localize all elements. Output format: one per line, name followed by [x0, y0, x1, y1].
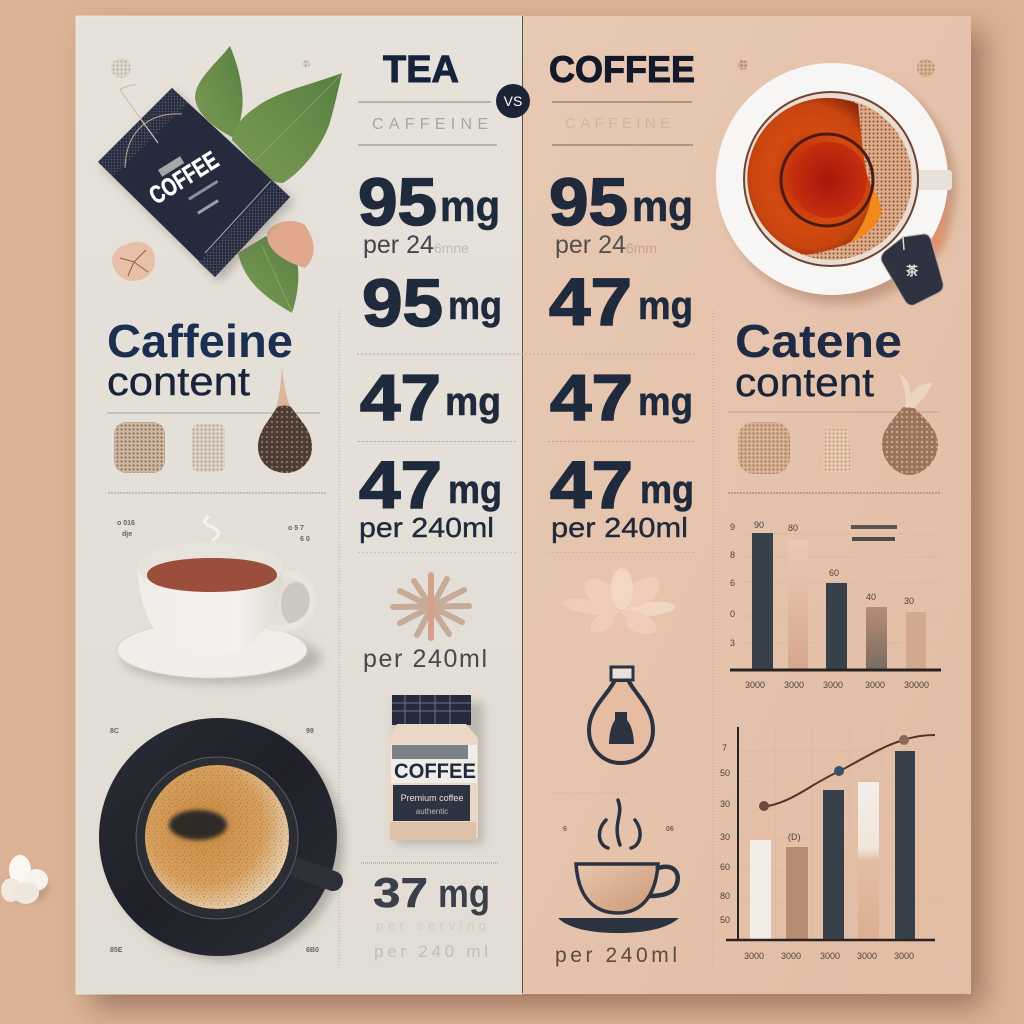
illustration: dark coffee sachet [98, 58, 294, 282]
text: per 240ml tea: per 240ml [363, 645, 487, 673]
bar chart: upper: 80 [788, 523, 798, 533]
bar chart with line: lower [720, 727, 941, 961]
stat: coffee 47mg third row [550, 361, 693, 434]
illustrations: texture swatches and seed (tea side) [114, 367, 312, 473]
text: faded caption: per serving [376, 918, 486, 933]
text: faded caption: per 240 ml [374, 942, 488, 961]
bar chart: upper: 3000 [784, 680, 804, 690]
stat: coffee 47mg third row: mg [638, 380, 693, 424]
stat: tea 47mg per 240ml: 47 [359, 448, 442, 523]
stat: tea 47mg per 240ml [359, 448, 502, 543]
subheading: coffee caffeine: CAFFEINE [565, 115, 670, 132]
tiny ornaments beside steam: 6 [563, 826, 567, 833]
stat: coffee 47mg per 240ml: mg [640, 468, 694, 512]
bar chart: upper [730, 520, 941, 690]
stat: coffee 47mg third row: 47 [550, 361, 633, 434]
bar chart: upper: 60 [829, 568, 839, 578]
bar chart: upper: 0 [730, 609, 735, 619]
stat: tea 47mg per 240ml: per 240ml [359, 512, 494, 543]
stat: coffee 47mg second row: mg [638, 284, 693, 328]
bars [752, 533, 926, 670]
stat: coffee 95mg [549, 165, 693, 259]
bar chart: upper: 3000 [823, 680, 843, 690]
text: tea caffeine content [107, 315, 293, 404]
stat: coffee 47mg per 240ml: per 240ml [551, 512, 688, 543]
bar chart with line: lower: 3000 [857, 951, 877, 961]
stat: tea 95mg: per 246mne [363, 231, 469, 259]
illustration: dark coffee sachet: COFFEE [144, 146, 224, 210]
stat: coffee 47mg per 240ml [550, 448, 694, 543]
stat: coffee 95mg: mg [632, 182, 693, 231]
text: tea caffeine content: Caffeine [107, 315, 293, 367]
icon: steaming cup [558, 800, 679, 933]
stat: tea 47mg per 240ml: mg [448, 468, 502, 512]
bar chart: upper: 3000 [865, 680, 885, 690]
small ornament [302, 60, 310, 68]
bar chart with line: lower: 50 [720, 768, 730, 778]
bar chart with line: lower: 3000 [744, 951, 764, 961]
bar chart: upper: 3 [730, 638, 735, 648]
text: coffee caffeine content [735, 315, 902, 405]
illustration: white flower outside panel [1, 855, 49, 904]
bar chart: upper: 40 [866, 592, 876, 602]
tiny ornaments around coffee cup: 6B0 [306, 947, 319, 954]
tiny ornaments above teacup [117, 520, 310, 543]
panel: tea (left) [76, 16, 522, 994]
stat: tea 95mg: 95 [358, 165, 437, 240]
text: per 240ml coffee: per 240ml [555, 944, 677, 967]
bar chart with line: lower: 60 [720, 862, 730, 872]
stat: tea 95mg second row [362, 266, 502, 341]
tiny ornaments above teacup: o 016 [117, 520, 135, 527]
subheading: tea caffeine [358, 102, 497, 145]
stat: coffee 47mg per 240ml: 47 [550, 448, 633, 523]
stat: 37 mg: 37 [373, 869, 428, 916]
small ornaments [917, 59, 935, 77]
tiny ornaments above teacup: dje [122, 531, 132, 538]
tiny ornaments around coffee cup [110, 728, 319, 954]
stat: tea 95mg: mg [440, 182, 500, 231]
illustration: lotus flower [562, 568, 676, 640]
bar chart: upper: 90 [754, 520, 764, 530]
illustration: cup of tea from above: 茶 [905, 263, 919, 278]
illustrations: texture swatches and seed (coffee side) [738, 374, 938, 475]
bar chart: upper: 9 [730, 522, 735, 532]
stat: tea 47mg third row: 47 [360, 361, 441, 434]
tiny ornaments above teacup: o 5 7 [288, 525, 304, 532]
bar chart: upper: 30000 [904, 680, 929, 690]
text: faded caption [374, 918, 488, 961]
stat: tea 47mg third row [360, 361, 501, 434]
heading: TEA: TEA [383, 49, 459, 91]
bar chart with line: lower: 30 [720, 832, 730, 842]
stat: tea 47mg third row: mg [445, 380, 501, 424]
illustration: coffee jar: authentic [416, 807, 448, 816]
stat: tea 95mg second row: mg [448, 284, 502, 328]
bar chart: upper: 30 [904, 596, 914, 606]
panel: coffee (right) [522, 16, 971, 994]
bar chart with line: lower: 80 [720, 891, 730, 901]
text: tea caffeine content: content [107, 360, 250, 404]
bar chart with line: lower: 3000 [781, 951, 801, 961]
badge: VS: VS [504, 93, 522, 109]
tiny ornaments beside steam: 06 [666, 826, 674, 833]
illustration: coffee jar: COFFEE [394, 760, 476, 783]
illustration: star flower [393, 575, 469, 638]
stat: coffee 95mg: 95 [549, 165, 628, 240]
bar chart with line: lower: 50 [720, 915, 730, 925]
illustration: coffee jar [388, 695, 483, 844]
illustration: tea leaves [195, 46, 342, 313]
bar chart: upper: 8 [730, 550, 735, 560]
illustration: white teacup on saucer [117, 516, 322, 684]
illustration: pink petal [267, 221, 314, 268]
bar chart with line: lower: 7 [722, 743, 727, 753]
tiny ornaments around coffee cup: 85E [110, 947, 123, 954]
tiny ornaments around coffee cup: 8C [110, 728, 119, 735]
tiny ornaments above teacup: 6 0 [300, 536, 310, 543]
bar chart with line: lower: 30 [720, 799, 730, 809]
tiny ornaments beside steam [563, 826, 674, 833]
stat: tea 95mg [358, 165, 500, 259]
stat: coffee 95mg: per 246mm [555, 231, 657, 259]
illustration: cup of tea from above [716, 63, 956, 305]
stat: coffee 47mg second row: 47 [549, 265, 632, 340]
badge: VS [496, 84, 530, 118]
illustration: black coffee cup from above [99, 718, 344, 961]
stat: coffee 47mg second row [549, 265, 693, 340]
bar chart with line: lower: 3000 [820, 951, 840, 961]
subheading: tea caffeine: CAFFEINE [372, 116, 488, 133]
illustration: small dried flower [112, 242, 155, 281]
stat: 37 mg: mg [438, 872, 490, 916]
icon: bottle drop [589, 667, 653, 763]
text: coffee caffeine content: content [735, 361, 874, 405]
bars [750, 751, 915, 940]
bar chart: upper: 3000 [745, 680, 765, 690]
bar chart with line: lower: 3000 [894, 951, 914, 961]
tiny ornaments around coffee cup: 99 [306, 728, 314, 735]
text: coffee caffeine content: Catene [735, 315, 902, 367]
bar chart with line: lower: (D) [788, 832, 800, 842]
trend line [760, 735, 935, 807]
bar chart: upper: 6 [730, 578, 735, 588]
stat: 37 mg [373, 869, 490, 916]
stat: tea 95mg second row: 95 [362, 266, 443, 341]
illustration: coffee jar: Premium coffee [401, 793, 463, 803]
heading: COFFEE: COFFEE [549, 49, 695, 90]
